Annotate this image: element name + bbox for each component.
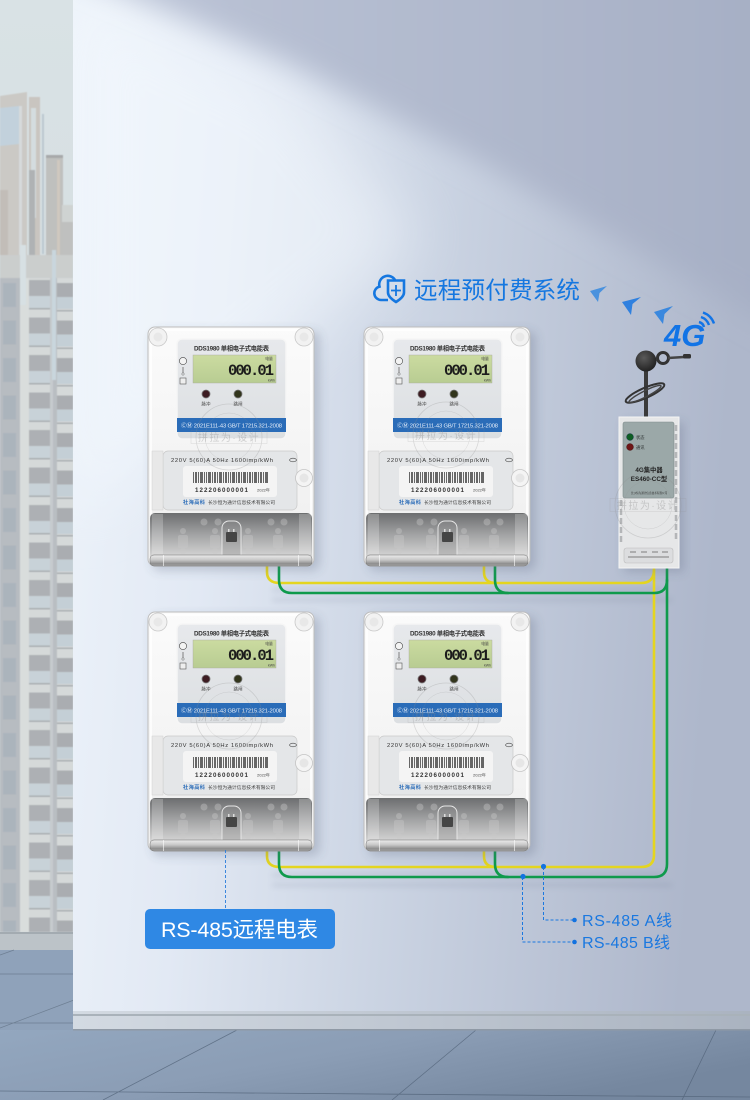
icon: cloud with shield	[374, 276, 404, 302]
meter bottom-right: 2022年	[473, 772, 486, 778]
meter bottom-left: 000.01	[228, 647, 274, 665]
meter top-right: 122206000001	[411, 487, 465, 494]
4G concentrator: 长沙恒为通计信息技术有限公司	[631, 491, 668, 495]
callout: RS-485 B wire	[520, 874, 670, 952]
status lights: 通讯	[636, 444, 645, 451]
watermark stamps: 拼拉为·设计	[617, 499, 679, 512]
meter bottom-right: 122206000001	[411, 772, 465, 779]
meter bottom-left: 122206000001	[195, 772, 249, 779]
meter bottom-right: DDS1980 单相电子式电能表	[410, 628, 486, 638]
meter top-right: 长沙恒为通计信息技术有限公司	[424, 499, 491, 506]
sky background	[0, 0, 73, 950]
meter top-right: 220V 5(60)A 50Hz 1600imp/kWh	[387, 458, 489, 464]
meter bottom-left: ⒸⓂ 2021E111-43 GB/T 17215.321-2008	[181, 706, 282, 714]
meter top-right: ⒸⓂ 2021E111-43 GB/T 17215.321-2008	[397, 422, 498, 430]
watermark stamps: 拼拉为·设计	[198, 431, 260, 444]
4G concentrator: 4G集中器	[635, 465, 663, 474]
status lights: 状态	[636, 434, 645, 441]
meter top-left: 社海高科	[183, 498, 206, 506]
meter top-left: 长沙恒为通计信息技术有限公司	[208, 499, 275, 506]
meter bottom-left: DDS1980 单相电子式电能表	[194, 628, 270, 638]
green RS-485 B wire	[279, 566, 667, 877]
meter bottom-right: 跳闸	[450, 686, 459, 692]
meter bottom-left	[148, 612, 320, 856]
meter bottom-left: 跳闸	[234, 686, 243, 692]
meter bottom-left: 220V 5(60)A 50Hz 1600imp/kWh	[171, 743, 273, 749]
4G concentrator: ES460-CC型	[631, 474, 667, 483]
meter bottom-right: kWh	[484, 664, 491, 668]
skirting board	[73, 1011, 750, 1030]
4G icon: 4G	[663, 318, 705, 353]
meter top-right: 2022年	[473, 486, 486, 492]
meter top-right: 电量	[481, 356, 489, 361]
heading text: 远程预付费系统	[414, 278, 580, 304]
meter bottom-left: 社海高科	[183, 783, 206, 791]
watermark stamps: 拼拉为·设计	[415, 429, 477, 442]
meter bottom-right: 社海高科	[399, 783, 422, 791]
meter bottom-right	[364, 612, 536, 856]
meter bottom-left: 2022年	[257, 772, 270, 778]
meter top-left: 220V 5(60)A 50Hz 1600imp/kWh	[171, 458, 273, 464]
meter bottom-left: 电量	[265, 641, 273, 646]
wires	[267, 566, 667, 877]
meter bottom-right: ⒸⓂ 2021E111-43 GB/T 17215.321-2008	[397, 706, 498, 714]
meter bottom-left: kWh	[268, 664, 275, 668]
leader line to meter label	[224, 850, 226, 909]
meter bottom-left: 长沙恒为通计信息技术有限公司	[208, 784, 275, 791]
meter top-left: ⒸⓂ 2021E111-43 GB/T 17215.321-2008	[181, 422, 282, 430]
callout: RS-485 A wire: RS-485 A线	[582, 912, 672, 930]
meter top-right: 社海高科	[399, 498, 422, 506]
meter top-right: kWh	[484, 378, 491, 382]
yellow RS-485 A wire	[267, 566, 654, 867]
meter bottom-left: 脉冲	[202, 686, 211, 692]
building outside window	[0, 92, 73, 932]
wire shadows	[272, 590, 672, 885]
status lights	[627, 434, 645, 451]
meter top-left: 脉冲	[202, 400, 211, 408]
meter top-left: DDS1980 单相电子式电能表	[194, 344, 270, 352]
meter top-left: 122206000001	[195, 487, 249, 494]
meter top-left: 电量	[265, 356, 273, 361]
meter bottom-right: 220V 5(60)A 50Hz 1600imp/kWh	[387, 743, 489, 749]
meter top-right	[364, 327, 536, 571]
meter top-right: 跳闸	[450, 400, 459, 408]
heading: remote prepaid system	[374, 276, 580, 304]
callout: RS-485 A wire	[541, 864, 672, 930]
meter top-left: 2022年	[257, 486, 270, 492]
watermark stamps: 拼拉为·设计	[198, 710, 260, 723]
watermark stamps	[191, 402, 686, 749]
signal arrows	[590, 286, 673, 324]
meter bottom-right: 脉冲	[418, 686, 427, 692]
label: RS-485 remote meter	[145, 909, 335, 949]
watermark stamps: 拼拉为·设计	[415, 710, 477, 723]
meter bottom-right: 电量	[481, 641, 489, 646]
4G concentrator	[619, 417, 684, 572]
antenna	[624, 350, 691, 418]
meter top-left	[148, 327, 320, 571]
meter bottom-right: 长沙恒为通计信息技术有限公司	[424, 784, 491, 791]
meter top-left: 000.01	[228, 362, 274, 380]
floor	[0, 1030, 750, 1100]
meter bottom-right: 000.01	[444, 647, 490, 665]
meter top-left: 跳闸	[234, 400, 243, 408]
meter top-right: DDS1980 单相电子式电能表	[410, 344, 486, 352]
outdoor low wall and ground	[0, 932, 74, 1030]
meter top-right: 脉冲	[418, 400, 427, 408]
terminal strip	[624, 548, 673, 563]
label: RS-485 remote meter: RS-485远程电表	[161, 918, 318, 942]
meter top-left: kWh	[268, 378, 275, 382]
callout: RS-485 B wire: RS-485 B线	[582, 934, 670, 952]
meter top-right: 000.01	[444, 362, 490, 380]
